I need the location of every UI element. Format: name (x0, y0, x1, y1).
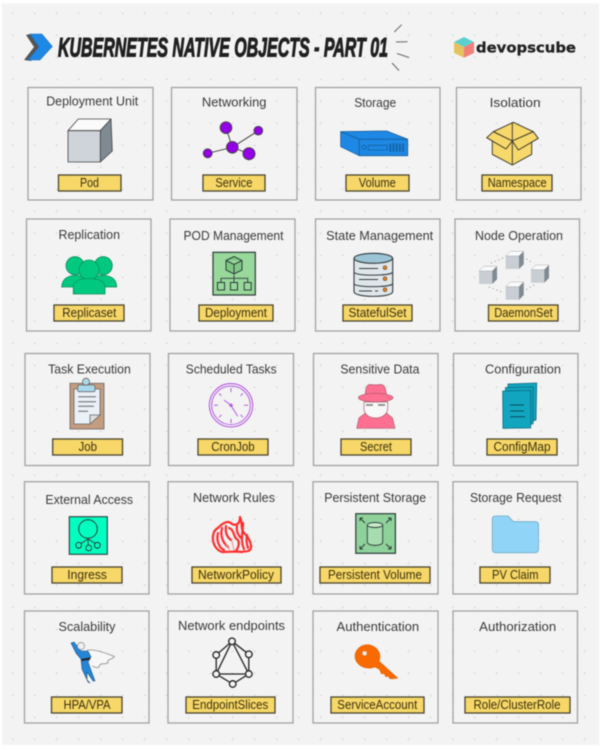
tag: HPA/VPA (64, 698, 111, 712)
tag: Role/ClusterRole (474, 698, 561, 712)
panel: ServiceAccount (313, 611, 438, 723)
tag: Service (215, 176, 252, 190)
panel: EndpointSlices (168, 611, 293, 723)
tag: NetworkPolicy (198, 568, 275, 582)
icon: folder (492, 516, 538, 553)
heading: Authorization (479, 620, 556, 634)
icon: storage server (341, 131, 408, 156)
panel: Volume (316, 88, 440, 200)
icon: hexagon mesh (213, 638, 252, 687)
icon: network graph (203, 122, 263, 160)
heading: Network endpoints (178, 619, 285, 633)
panel: StatefulSet (316, 219, 440, 331)
tag: StatefulSet (348, 306, 407, 320)
heading: Scalability (58, 620, 116, 634)
heading: Sensitive Data (340, 362, 419, 376)
heading: Isolation (490, 96, 541, 110)
heading: Scheduled Tasks (186, 362, 277, 376)
heading: POD Management (184, 229, 284, 243)
tag: PV Claim (492, 568, 538, 582)
tag: Persistent Volume (328, 568, 422, 582)
icon: cube (68, 119, 112, 162)
icon: clipboard (70, 378, 104, 429)
panel: HPA/VPA (24, 611, 149, 723)
icon: distributed cubes (479, 251, 549, 300)
icon: firewall flame (213, 517, 251, 552)
panel: Role/ClusterRole (453, 611, 578, 723)
icon: logo cube (454, 37, 474, 58)
tag: Deployment (205, 306, 267, 320)
tag: CronJob (211, 440, 255, 454)
panel: Service (172, 88, 297, 200)
title: KUBERNETES NATIVE OBJECTS - PART 01 (58, 32, 388, 62)
tag: Replicaset (62, 306, 117, 320)
tag: Job (78, 440, 97, 454)
panel: Ingress (24, 482, 149, 594)
tag: ConfigMap (494, 440, 551, 454)
heading: State Management (326, 229, 434, 243)
panel: Deployment (170, 219, 295, 331)
tag: DaemonSet (494, 306, 553, 320)
heading: Persistent Storage (324, 491, 426, 505)
heading: Authentication (336, 620, 419, 634)
tag: Ingress (67, 568, 107, 582)
icon: volume expand (356, 514, 395, 553)
icon: people group (62, 257, 117, 294)
panel: Secret (314, 354, 438, 466)
panel: Replicaset (26, 219, 151, 331)
heading: Storage Request (470, 491, 562, 505)
heading: Task Execution (48, 362, 131, 376)
icon: flying hero (71, 642, 114, 683)
tag: Namespace (488, 176, 547, 190)
tag: Pod (80, 176, 99, 190)
panel: PV Claim (453, 482, 578, 594)
panel: Persistent Volume (313, 482, 438, 594)
icon: key (355, 645, 398, 679)
icon: spy (357, 384, 395, 428)
icon: ingress node (69, 517, 107, 554)
heading: Deployment Unit (46, 94, 139, 108)
logo wordmark: devopscube (476, 40, 576, 56)
logo (454, 37, 576, 58)
header (24, 25, 576, 70)
panel: DaemonSet (455, 219, 580, 331)
icon: documents (503, 383, 537, 428)
heading: Networking (202, 96, 267, 110)
heading: Storage (354, 96, 396, 110)
heading: External Access (45, 493, 133, 507)
heading: Network Rules (193, 491, 275, 505)
tag: EndpointSlices (192, 698, 268, 712)
icon: open box (487, 122, 538, 165)
icon: database (354, 253, 393, 296)
icon: deployment diagram (213, 252, 255, 295)
icon: blue chevron (24, 34, 52, 61)
panel: NetworkPolicy (168, 482, 293, 594)
panel: Job (25, 354, 150, 466)
panel: Namespace (456, 88, 581, 200)
panel: ConfigMap (454, 354, 578, 466)
heading: Node Operation (475, 229, 563, 243)
heading: Configuration (485, 362, 561, 376)
tag: Secret (360, 440, 392, 454)
tag: ServiceAccount (337, 698, 418, 712)
heading: Replication (58, 228, 120, 242)
icon: spark lines (392, 25, 409, 70)
panel: Pod (28, 88, 153, 200)
panel: CronJob (168, 354, 294, 466)
tag: Volume (359, 176, 396, 190)
icon: clock (209, 384, 253, 427)
